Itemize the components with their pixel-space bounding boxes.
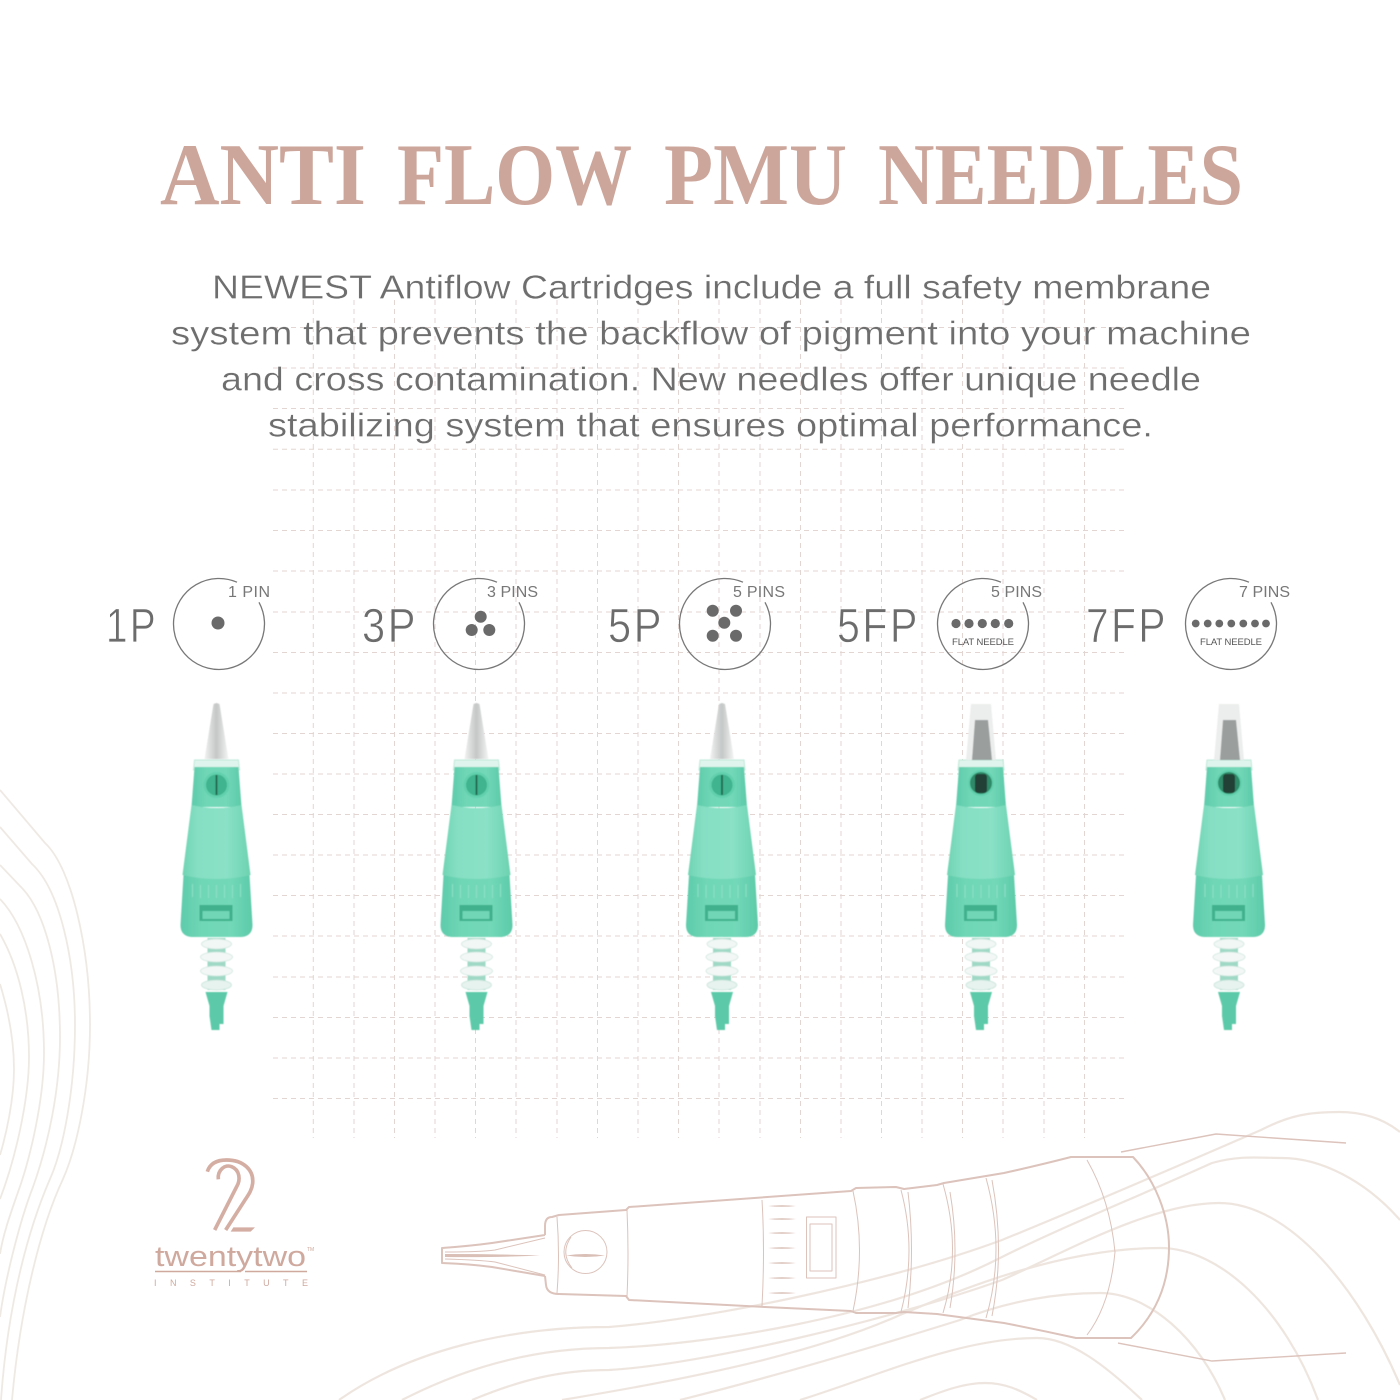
needle cartridge: 5FP bbox=[945, 704, 1017, 1030]
needle type: 5FP bbox=[837, 578, 1042, 1030]
icon: 1 pin diagram: 1 PIN bbox=[228, 584, 270, 601]
needle type: 3P bbox=[362, 578, 538, 1030]
intro paragraph: system that prevents the backflow of pigment into your machine bbox=[171, 314, 1251, 352]
logo: twentytwo institute bbox=[154, 1160, 314, 1288]
flared guide lines bbox=[1118, 1134, 1346, 1361]
pen outline bbox=[442, 1157, 1169, 1338]
icon: 7 pins flat needle diagram bbox=[1186, 578, 1290, 669]
title bbox=[160, 127, 1243, 224]
icon: 7 pins flat needle diagram: FLAT NEEDLE bbox=[1200, 637, 1262, 648]
intro paragraph: NEWEST Antiflow Cartridges include a full safety membrane bbox=[212, 268, 1211, 306]
grip rectangle bbox=[806, 1217, 836, 1278]
icon: 5 pins diagram bbox=[680, 578, 785, 669]
label: 3P: 3P bbox=[362, 600, 418, 653]
tip and window slits bbox=[445, 1254, 605, 1257]
intro paragraph bbox=[171, 268, 1251, 444]
title: NEEDLES bbox=[878, 127, 1243, 224]
intro paragraph: stabilizing system that ensures optimal performance. bbox=[268, 406, 1153, 444]
icon: 3 pins diagram bbox=[434, 578, 538, 669]
title: PMU bbox=[664, 127, 847, 224]
needle cartridge: 7FP bbox=[1193, 704, 1265, 1030]
oval window bbox=[564, 1230, 607, 1274]
title: ANTI bbox=[160, 127, 366, 224]
icon: 5 pins flat needle diagram: FLAT NEEDLE bbox=[952, 637, 1014, 648]
tagline: INSTITUTE bbox=[154, 1278, 308, 1288]
label: 5FP: 5FP bbox=[837, 600, 920, 653]
icon: 5 pins flat needle diagram: 5 PINS bbox=[991, 584, 1042, 601]
needle type: 7FP bbox=[1086, 578, 1290, 1030]
icon: 3 pins diagram: 3 PINS bbox=[487, 584, 538, 601]
needle type: 1P bbox=[106, 578, 270, 1030]
icon: 1 pin diagram bbox=[174, 578, 270, 669]
icon: double numeral 2 bbox=[207, 1160, 255, 1232]
icon: 7 pins flat needle diagram: 7 PINS bbox=[1239, 584, 1290, 601]
needle cartridge: 5P bbox=[686, 703, 758, 1030]
title: FLOW bbox=[397, 127, 632, 224]
needle cartridge: 3P bbox=[440, 703, 512, 1030]
label: 1P: 1P bbox=[106, 600, 158, 653]
label: 7FP: 7FP bbox=[1086, 600, 1168, 653]
label: 5P: 5P bbox=[608, 600, 664, 653]
needle cartridge: 1P bbox=[180, 703, 252, 1030]
ticks bbox=[768, 1205, 796, 1294]
intro paragraph: and cross contamination. New needles offer unique needle bbox=[221, 360, 1201, 398]
needle type: 5P bbox=[608, 578, 785, 1030]
icon: 5 pins diagram: 5 PINS bbox=[733, 584, 785, 601]
icon: 5 pins flat needle diagram bbox=[938, 578, 1042, 669]
wordmark: twentytwo bbox=[155, 1241, 306, 1273]
pen machine line drawing bbox=[442, 1134, 1346, 1361]
logo: twentytwo institute: TM bbox=[307, 1247, 314, 1253]
